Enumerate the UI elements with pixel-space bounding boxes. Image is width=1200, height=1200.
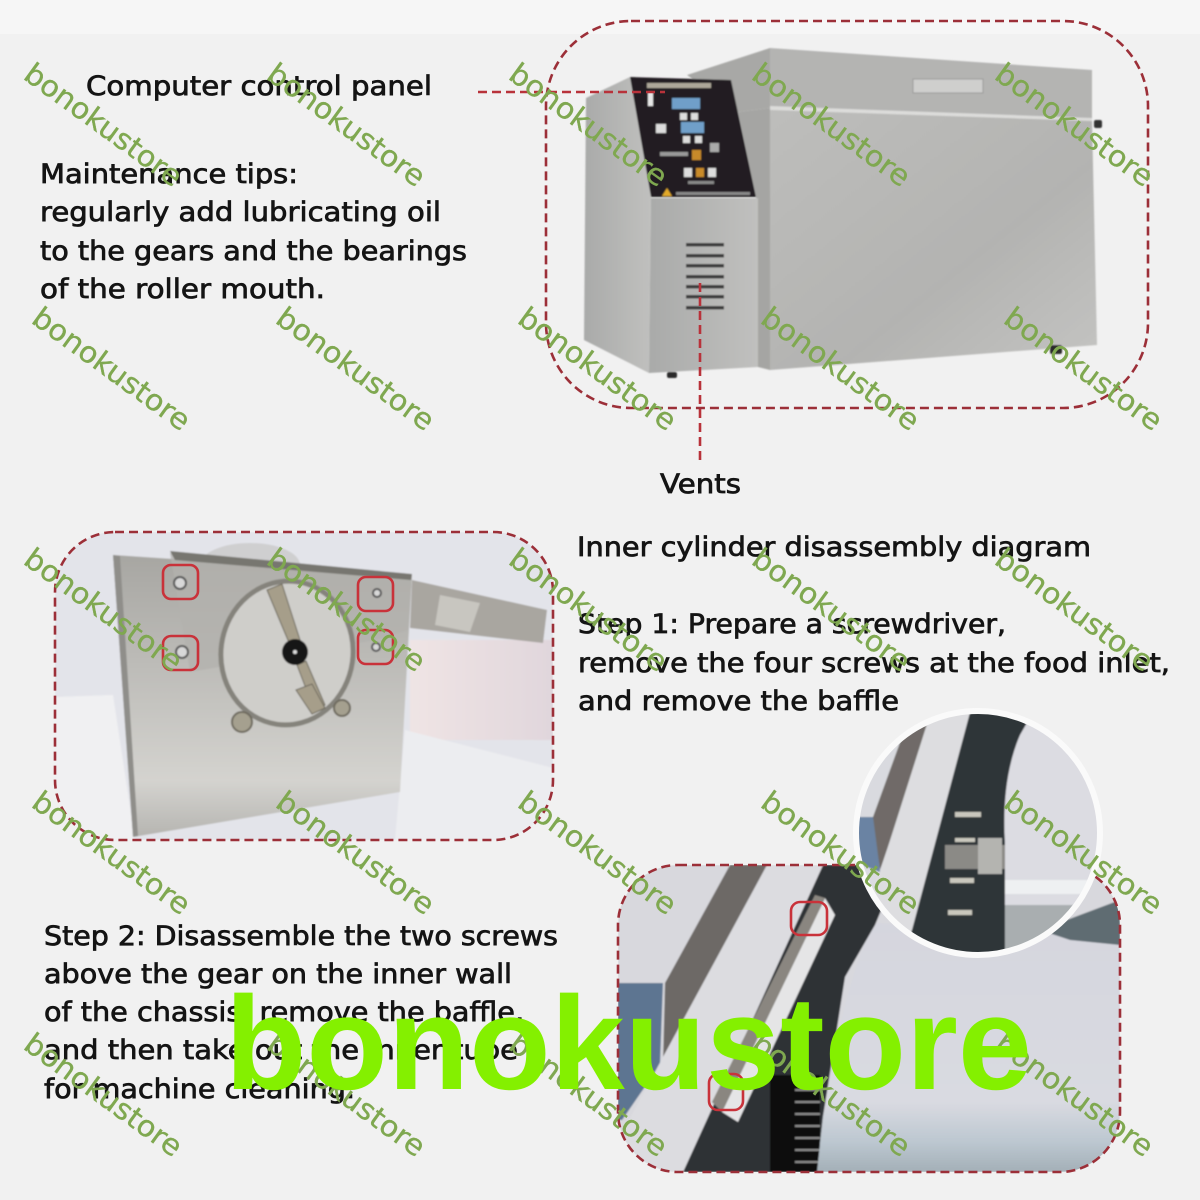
label: computer control panel: Computer control panel <box>86 71 432 102</box>
watermarks: small diagonal: bonokustore <box>998 784 1169 922</box>
panel: four screws photo <box>55 532 553 840</box>
text block: maintenance tips: to the gears and the bearings <box>40 236 467 267</box>
watermarks: small diagonal: bonokustore <box>746 56 917 194</box>
screws <box>174 577 381 658</box>
chassis side face <box>113 555 412 837</box>
watermarks: small diagonal: bonokustore <box>755 300 926 438</box>
red marks: gear screws <box>709 902 827 1110</box>
leader: vents <box>699 283 701 465</box>
watermarks: small diagonal: bonokustore <box>746 1026 917 1164</box>
watermark: large: bonokustore <box>225 970 1032 1118</box>
watermarks: small diagonal: bonokustore <box>18 541 189 679</box>
watermarks: small diagonal: bonokustore <box>989 56 1160 194</box>
text block: step 2: for machine cleaning. <box>44 1074 355 1105</box>
watermarks: small diagonal: bonokustore <box>18 56 189 194</box>
watermarks: small diagonal: bonokustore <box>270 300 441 438</box>
label: vents: Vents <box>660 469 741 500</box>
red marks: screws <box>163 565 393 670</box>
watermarks: small diagonal: bonokustore <box>755 784 926 922</box>
text block: step 2: Step 2: Disassemble the two screws <box>44 921 558 952</box>
machine rear top <box>687 48 770 112</box>
light band <box>654 866 823 1172</box>
dashed frame: machine <box>546 21 1148 408</box>
watermarks: small diagonal: bonokustore <box>26 784 197 922</box>
gear bars <box>267 584 325 714</box>
watermarks: small diagonal: bonokustore <box>26 300 197 438</box>
dark stripe <box>663 865 767 1063</box>
heading: disassembly diagram: Inner cylinder disassembly diagram <box>577 532 1091 563</box>
side arm <box>410 580 547 643</box>
machine feet <box>667 345 1062 378</box>
watermarks: small diagonal: bonokustore <box>998 300 1169 438</box>
inset circle: gear close-up <box>850 700 1110 960</box>
control panel <box>630 77 756 197</box>
text block: step 1: Step 1: Prepare a screwdriver, <box>578 609 1006 640</box>
blue box <box>618 983 663 1120</box>
machine front panel <box>770 108 1097 370</box>
watermarks: small diagonal: bonokustore <box>512 784 683 922</box>
chain and sprocket <box>945 812 1005 915</box>
text block: step 2: of the chassis, remove the baffle, <box>44 997 524 1028</box>
dashed frame: screws photo <box>55 532 553 840</box>
side knob <box>1094 120 1102 128</box>
vent cover <box>649 198 758 373</box>
watermarks: small diagonal: bonokustore <box>989 541 1160 679</box>
text block: maintenance tips: of the roller mouth. <box>40 274 325 305</box>
watermarks: small diagonal: bonokustore <box>18 1026 189 1164</box>
rail <box>722 898 835 1122</box>
machine lid <box>770 48 1092 120</box>
gears <box>770 1075 820 1172</box>
text block: step 2 <box>44 921 558 1105</box>
panel: machine photo <box>584 48 1102 378</box>
watermarks: small diagonal: bonokustore <box>261 541 432 679</box>
shaft hole <box>282 639 308 665</box>
text block: maintenance tips: Maintenance tips: <box>40 159 298 190</box>
watermarks: small diagonal: bonokustore <box>503 56 674 194</box>
baffle plate <box>170 552 218 670</box>
watermarks: small diagonal: bonokustore <box>746 541 917 679</box>
text block: maintenance tips <box>40 159 467 305</box>
panel: inner wall photo <box>618 865 1120 1172</box>
watermarks: small diagonal: bonokustore <box>261 56 432 194</box>
watermarks: small diagonal: bonokustore <box>503 1026 674 1164</box>
watermarks: small diagonal: bonokustore <box>261 1026 432 1164</box>
text block: step 1: remove the four screws at the food inlet, <box>578 648 1170 679</box>
leader: control panel <box>478 91 665 93</box>
roller <box>816 1116 1120 1172</box>
lid handle <box>913 79 983 93</box>
text block: step 1: and remove the baffle <box>578 686 899 717</box>
dashed frame: inner wall photo <box>618 865 1120 1172</box>
watermarks: small diagonal: bonokustore <box>503 541 674 679</box>
nuts <box>232 712 252 732</box>
machine left side <box>584 77 651 373</box>
watermarks: small diagonal: bonokustore <box>512 300 683 438</box>
text block: maintenance tips: regularly add lubricating oil <box>40 197 441 228</box>
text block: step 2: and then take out the inner tube <box>44 1035 518 1066</box>
text block: step 2: above the gear on the inner wall <box>44 959 512 990</box>
dark interior <box>683 865 900 1172</box>
watermarks: small diagonal: bonokustore <box>270 784 441 922</box>
watermarks: small diagonal: bonokustore <box>989 1026 1160 1164</box>
ring and disc <box>218 578 356 728</box>
text block: step 1 <box>578 609 1170 717</box>
vent slots <box>686 243 724 310</box>
